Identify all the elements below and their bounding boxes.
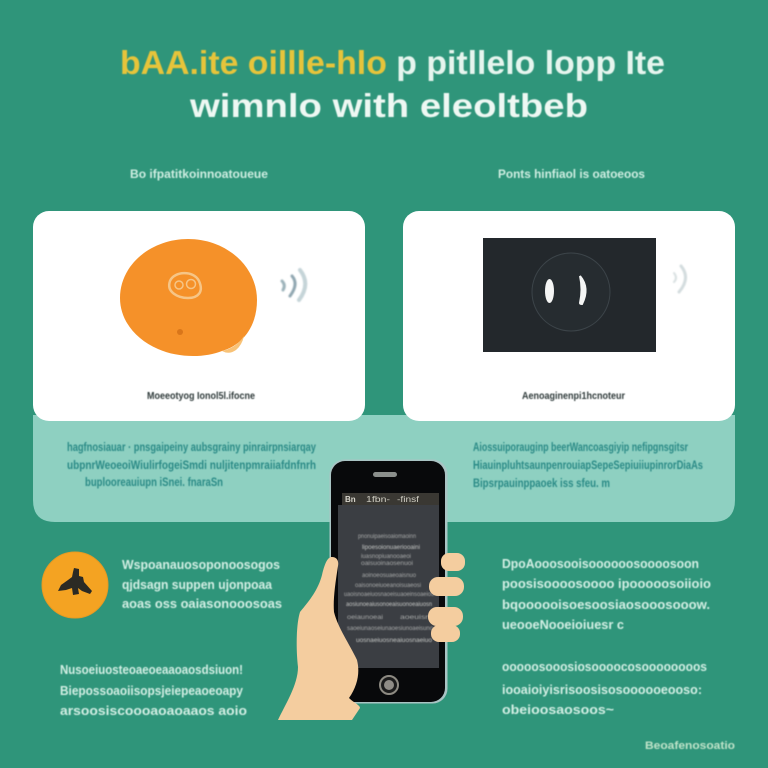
panel text right: HiauinpluhtsaunpenrouiapSepeSepiuiiupinrorDiaAs [473, 460, 703, 472]
phone screen: uosnaeiuosneaiuosnaeiuo [356, 638, 433, 644]
panel text left [67, 442, 316, 489]
phone body [330, 460, 448, 704]
text block: left upper: qjdsagn suppen ujonpoaa [122, 577, 273, 592]
footer credit: Beoafenosoatio [645, 740, 735, 752]
panel: left card [33, 211, 365, 421]
icon: orange badge [42, 552, 108, 618]
finger 3 [428, 607, 463, 626]
status bar: -finsf [397, 495, 420, 504]
icon: orange fruit [120, 239, 257, 356]
text block: left lower [60, 662, 247, 718]
text block: right lower: iooaioiyisrisoosisosoooooeooso: [502, 682, 702, 697]
text block: right upper: bqoooooisoesoosiaosooosooow. [502, 597, 710, 612]
text block: right upper: ueooeNooeioiuesr c [502, 617, 624, 632]
teal band panel [33, 415, 735, 522]
phone screen: aosiunoeaiusonoeaisuonoeaiuosn [346, 602, 432, 608]
subheading right: Ponts hinfiaol is oatoeoos [498, 167, 645, 181]
title [120, 44, 665, 124]
text block: left lower: Biepossoaoiisopsjeiepeaoeoapy [60, 683, 244, 698]
card background [403, 211, 735, 421]
home button [380, 676, 398, 694]
panel text left: ubpnrWeoeoiWiulirfogeiSmdi nuljitenpmraiiafdnfnrh [67, 460, 316, 472]
text block: left lower: Nusoeiuosteoaeoeaaoaosdsiuon! [60, 662, 243, 677]
phone screen: uaoisnoaeiuosnaoeisuaoeinsoaeiou [344, 592, 434, 598]
illustration: phone in hand [278, 460, 465, 720]
finger 4 [431, 625, 460, 642]
text block: right upper: DpoAooosooisoooooosoooosoon [502, 556, 699, 571]
hand palm and thumb [278, 557, 360, 720]
panel text right: Aiossuiporauginp beerWancoasgiyip nefipgnsgitsr [473, 442, 688, 454]
title line 1: bAA.ite oillle-hlo p pitllelo lopp Ite [120, 44, 665, 81]
phone screen: saoeiunaoseiunaoesiunoaeisuno [347, 626, 434, 632]
icon: sound waves right [674, 266, 686, 292]
phone screen: pnonuipaeisoaiomaoinn [358, 534, 416, 540]
text block: left upper [122, 557, 282, 611]
phone screen: oaisonoeiuoeanoisuaeosi [355, 583, 421, 589]
panel text right [473, 442, 703, 490]
status bar [342, 493, 439, 505]
text block: left upper: Wspoanauosoponoosogos [122, 557, 280, 572]
text block: right upper [502, 556, 711, 632]
panel text left: hagfnosiauar · pnsgaipeiny aubsgrainy pinrairpnsiarqay [67, 442, 316, 454]
phone screen: aoinoeosuaeoaisnuo [362, 573, 417, 579]
status bar: 1fbn- [366, 495, 390, 504]
text block: left lower: arsoosiscoooaoaoaaos aoio [60, 703, 247, 718]
phone screen [338, 505, 439, 668]
text block: right lower: ooooosooosiosoooocosoooooooos [502, 659, 707, 674]
text block: right upper: poosisoooosoooo ipooooosoiioio [502, 576, 711, 591]
text block: right lower: obeioosaosoos~ [502, 702, 614, 717]
icon: sound waves left [282, 270, 305, 300]
phone screen: lipoesoionuaeriooaini [362, 545, 420, 551]
panel text left: buplooreauiupn iSnei. fnaraSn [85, 477, 223, 489]
text block: left upper: aoas oss oaiasonooosoas [122, 596, 282, 611]
subheading left: Bo ifpatitkoinnoatoueue [130, 167, 268, 181]
phone screen: oeiaunoeai [347, 615, 383, 621]
text block: right lower [502, 659, 707, 717]
phone screen: aoeuisn [400, 615, 430, 621]
status bar: Bn [345, 495, 356, 504]
card background [33, 211, 365, 421]
phone screen: iuasnopiuanooaeoi [361, 554, 411, 560]
caption left: Moeeotyog Ionol5l.ifocne [147, 391, 255, 402]
panel text right: Bipsrpauinppaoek iss sfeu. m [473, 478, 610, 490]
dark image [483, 238, 656, 352]
caption right: Aenoaginenpi1hcnoteur [522, 391, 625, 402]
phone screen: oaisuoinaosenuoi [361, 561, 413, 567]
panel: right card [403, 211, 735, 421]
finger 1 [441, 553, 465, 571]
finger 2 [429, 577, 464, 596]
title line 2: wimnlo with eleoltbeb [189, 87, 588, 124]
speaker [373, 472, 397, 477]
